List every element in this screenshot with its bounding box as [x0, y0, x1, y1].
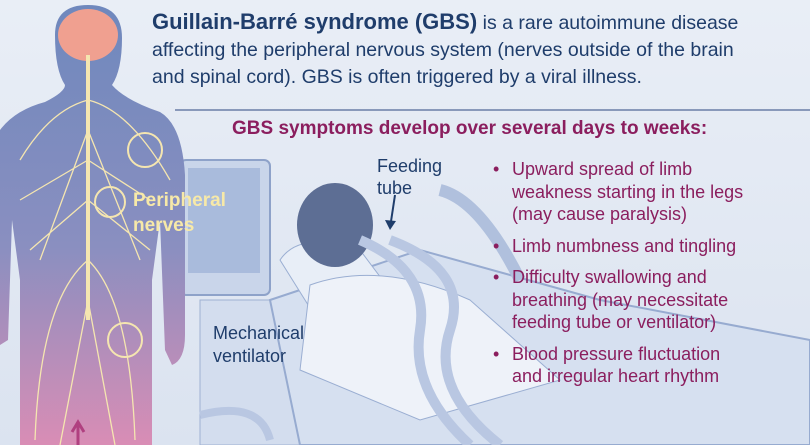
symptoms list: • [493, 344, 499, 364]
label: feeding tube: tube [377, 178, 412, 198]
symptoms list: Limb numbness and tingling [512, 236, 736, 256]
symptoms list: Upward spread of limb [512, 159, 692, 179]
body silhouette [0, 5, 185, 445]
title text: Guillain-Barré syndrome (GBS) is a rare autoimmune disease [152, 9, 738, 34]
title text: affecting the peripheral nervous system (nerves outside of the brain [152, 39, 734, 61]
divider [175, 109, 810, 111]
label: peripheral nerves: nerves [133, 215, 194, 236]
symptoms heading: GBS symptoms develop over several days to weeks: [232, 118, 707, 139]
symptoms list: feeding tube or ventilator) [512, 312, 716, 332]
title text [152, 9, 738, 88]
feeding tube arrow [385, 195, 396, 230]
title text: and spinal cord). GBS is often triggered by a viral illness. [152, 66, 642, 88]
symptoms list: Blood pressure fluctuation [512, 344, 720, 364]
symptoms list: breathing (may necessitate [512, 290, 728, 310]
monitor [180, 160, 310, 445]
symptoms list: and irregular heart rhythm [512, 366, 719, 386]
symptoms list: • [493, 159, 499, 179]
symptoms list: weakness starting in the legs [512, 182, 743, 202]
label: feeding tube: Feeding [377, 156, 442, 176]
symptoms list: Difficulty swallowing and [512, 267, 707, 287]
symptoms list: • [493, 236, 499, 256]
label: peripheral nerves: Peripheral [133, 190, 226, 211]
label: feeding tube [377, 156, 442, 198]
label: mechanical ventilator [213, 323, 304, 366]
symptoms list: • [493, 267, 499, 287]
symptoms list: (may cause paralysis) [512, 204, 687, 224]
label: mechanical ventilator: ventilator [213, 346, 286, 366]
symptoms list [493, 159, 743, 386]
label: mechanical ventilator: Mechanical [213, 323, 304, 343]
label: peripheral nerves [133, 190, 226, 236]
bed and patient [200, 183, 810, 445]
